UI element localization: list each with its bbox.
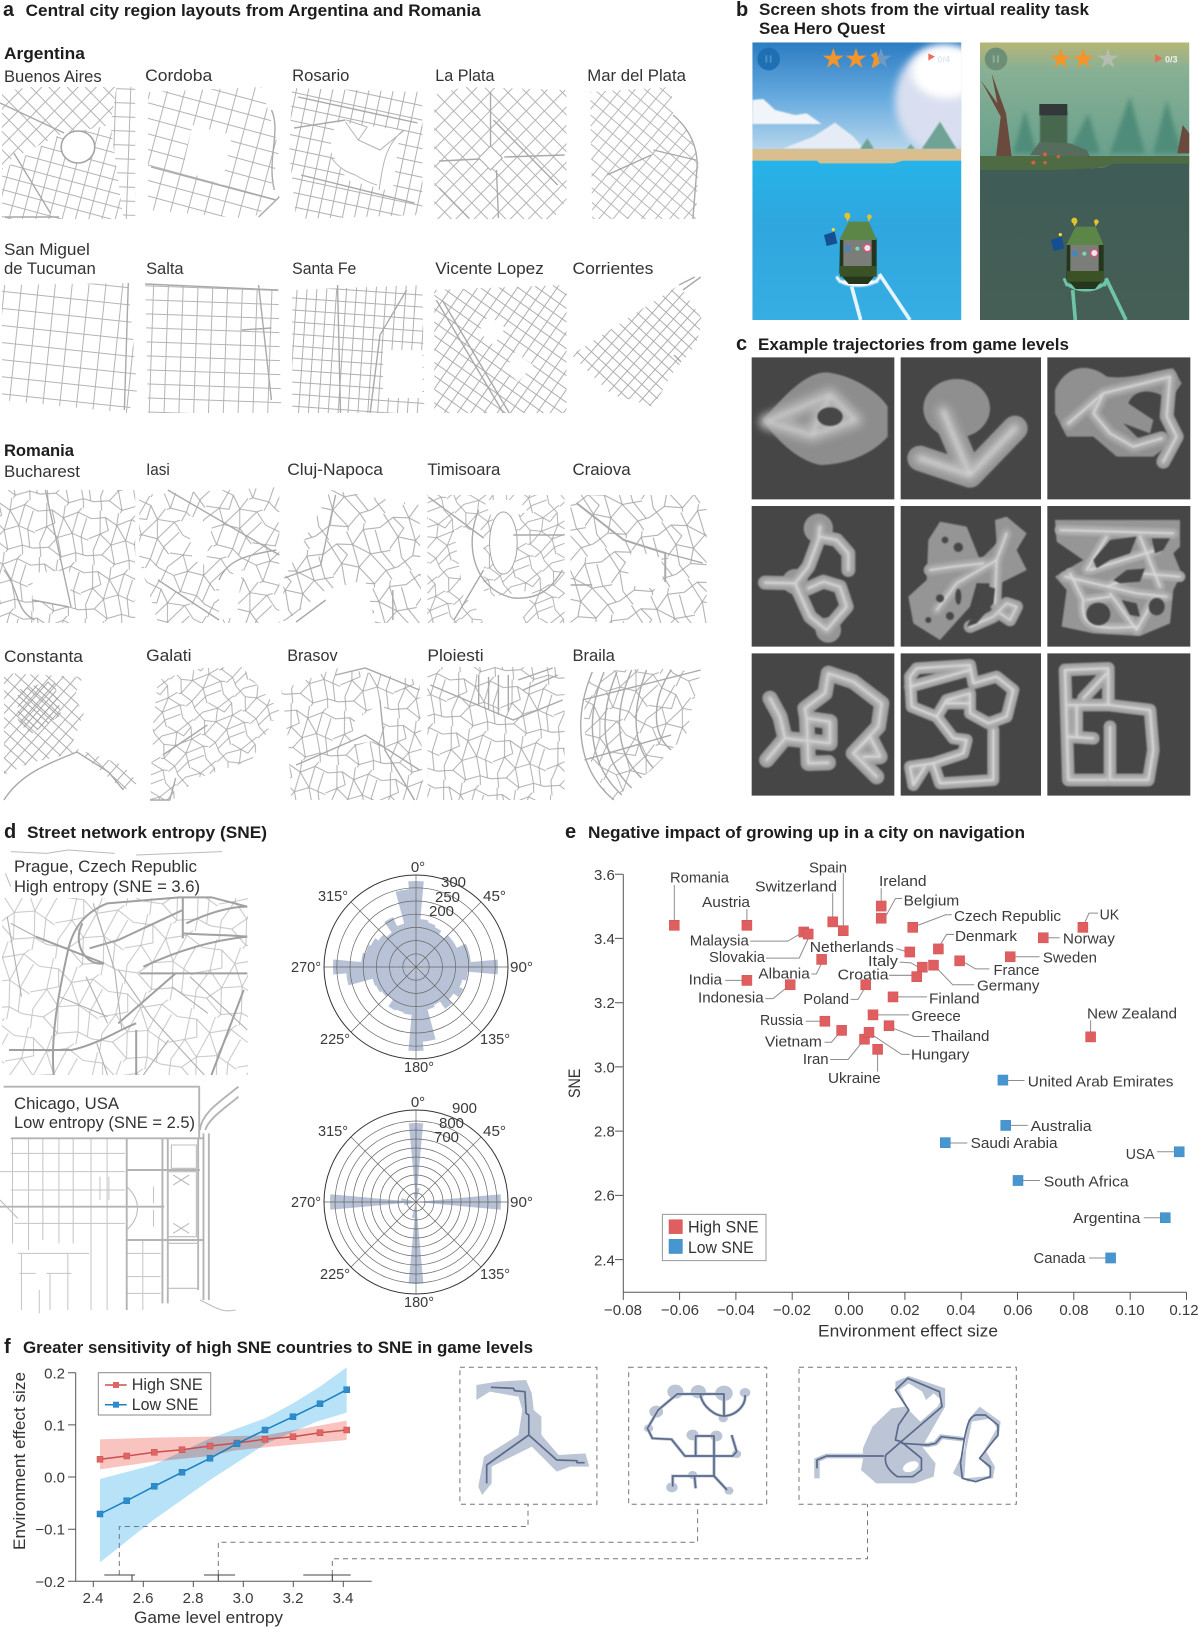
chart axes: 0.10 <box>1115 1302 1145 1319</box>
panel f: game level entropy <box>4 1336 1016 1627</box>
country labels: Vietnam <box>765 1033 822 1050</box>
city: San Miguel de Tucuman: de Tucuman <box>4 260 96 278</box>
city: Mar del Plata <box>587 67 699 219</box>
city: Rosario <box>289 67 422 219</box>
country labels <box>670 859 1177 1267</box>
panel f letter: f <box>4 1336 11 1358</box>
country labels: Greece <box>911 1008 961 1025</box>
trajectory 7 <box>767 673 882 777</box>
trajectory 1 <box>763 372 888 465</box>
map: Prague <box>2 850 248 1075</box>
panel e heading: Negative impact of growing up in a city on navigation <box>588 824 1025 842</box>
chart axes: 2.6 <box>594 1187 615 1204</box>
city: Braila: Braila <box>572 647 616 665</box>
country labels: Thailand <box>931 1028 989 1045</box>
city: Brasov: Brasov <box>287 647 338 665</box>
city: Cordoba <box>145 67 279 219</box>
chart axes: −0.08 <box>604 1302 642 1319</box>
rose chart labels: Prague: 315° <box>318 888 348 905</box>
city: Craiova: Craiova <box>572 461 632 479</box>
rose chart labels: Chicago: 135° <box>480 1266 510 1283</box>
city: Timisoara: Timisoara <box>427 461 501 479</box>
country labels: Poland <box>803 991 849 1008</box>
city: San Miguel de Tucuman: San Miguel <box>4 241 90 259</box>
rose chart labels: Prague: 225° <box>320 1031 350 1048</box>
panel d letter: d <box>4 821 16 843</box>
axis tick labels: 3.4 <box>333 1590 353 1607</box>
city: Cluj-Napoca <box>283 461 421 623</box>
rose chart labels: Chicago: 225° <box>320 1266 350 1283</box>
axis tick labels: 2.8 <box>183 1590 203 1607</box>
country labels: Romania <box>670 869 730 887</box>
confidence bands <box>100 1367 347 1562</box>
city: Ploiesti: Ploiesti <box>427 647 484 665</box>
y axis title: SNE <box>565 1069 584 1098</box>
subheading: Romania: Romania <box>4 442 75 460</box>
chart axes <box>68 1373 372 1587</box>
chart axes: 0.00 <box>834 1302 864 1319</box>
city: Rosario: Rosario <box>292 67 349 85</box>
axis tick labels <box>35 1366 353 1607</box>
city: La Plata: La Plata <box>435 67 495 85</box>
rose chart labels: Chicago: 800 <box>439 1115 464 1132</box>
country labels: Germany <box>977 977 1040 995</box>
trajectory grid <box>752 357 1190 796</box>
city: Santa Fe <box>292 260 424 413</box>
axis tick labels: −0.2 <box>35 1574 65 1591</box>
chart axes: 0.04 <box>946 1302 976 1319</box>
city: Buenos Aires <box>0 68 135 219</box>
example level: medium entropy <box>629 1367 767 1504</box>
panel b: game screenshots <box>736 0 1189 320</box>
country labels: Italy <box>868 953 898 970</box>
panel d heading: Street network entropy (SNE) <box>27 824 267 842</box>
trajectory 8 <box>910 665 1013 785</box>
country labels: UK <box>1100 906 1119 924</box>
rose chart labels: Prague <box>291 859 533 1076</box>
leader lines <box>674 873 1174 1258</box>
city: Constanta: Constanta <box>4 648 84 666</box>
country labels: France <box>994 962 1040 979</box>
panel d: street network entropy <box>0 821 533 1313</box>
rose chart labels: Prague: 135° <box>480 1031 510 1048</box>
screenshot: ocean level <box>752 42 985 320</box>
rose chart labels: Prague: 45° <box>483 888 506 905</box>
country labels: Denmark <box>955 928 1017 945</box>
city: Iasi: Iasi <box>146 461 170 479</box>
panel a: city layouts <box>0 0 707 800</box>
chart axes: 0.12 <box>1169 1302 1199 1319</box>
country labels: Ukraine <box>828 1070 881 1087</box>
city: La Plata <box>434 67 567 219</box>
axis tick labels: 3.2 <box>283 1590 303 1607</box>
caption: Prague: High entropy (SNE = 3.6) <box>14 878 200 896</box>
rose chart labels: Prague: 250 <box>435 889 460 906</box>
city: Corrientes: Corrientes <box>572 260 653 278</box>
axis tick labels: 0.2 <box>44 1366 65 1382</box>
axis tick labels: 0.0 <box>44 1470 65 1486</box>
city: Bucharest <box>0 463 135 623</box>
legend: High SNE <box>688 1218 759 1237</box>
country labels: South Africa <box>1044 1173 1129 1190</box>
panel b heading <box>759 1 1090 38</box>
line chart <box>11 1366 868 1627</box>
trajectory 3 <box>1055 368 1182 462</box>
city: Ploiesti <box>427 647 565 800</box>
city: Buenos Aires: Buenos Aires <box>4 68 102 86</box>
rose chart labels: Prague: 180° <box>404 1059 434 1076</box>
trajectory 2 <box>920 379 1015 475</box>
panel e: scatter plot <box>565 821 1199 1340</box>
country labels: Argentina <box>1073 1210 1141 1227</box>
chart axes: 3.0 <box>594 1060 615 1077</box>
chart axes: 2.4 <box>594 1252 615 1269</box>
country labels: Czech Republic <box>954 908 1061 925</box>
country labels: Saudi Arabia <box>971 1135 1058 1152</box>
panel c letter: c <box>736 333 747 355</box>
chart axes: −0.06 <box>661 1302 699 1319</box>
country labels: New Zealand <box>1087 1005 1177 1022</box>
low SNE markers <box>940 1075 1184 1263</box>
city: Iasi <box>139 461 279 623</box>
rose chart labels: Chicago: 900 <box>452 1100 477 1117</box>
panel f heading: Greater sensitivity of high SNE countries to SNE in game levels <box>23 1339 533 1357</box>
city: Mar del Plata: Mar del Plata <box>587 67 687 85</box>
trajectory 6 <box>1055 520 1182 636</box>
rose chart labels: Chicago: 45° <box>483 1123 506 1140</box>
legend <box>98 1373 211 1415</box>
city: Craiova <box>570 461 707 623</box>
panel b heading: Screen shots from the virtual reality task <box>759 1 1090 19</box>
country labels: Sweden <box>1043 950 1097 967</box>
chart axes: −0.04 <box>717 1302 755 1319</box>
city: Galati: Galati <box>146 647 191 665</box>
panel e letter: e <box>565 821 576 843</box>
series: high SNE <box>97 1427 350 1462</box>
country labels: Spain <box>809 859 847 876</box>
axis tick labels: 2.4 <box>83 1590 103 1607</box>
city: Santa Fe: Santa Fe <box>292 260 356 278</box>
chart axes: −0.02 <box>773 1302 811 1319</box>
panel b heading: Sea Hero Quest <box>759 20 886 38</box>
country labels: USA <box>1126 1146 1156 1163</box>
country labels: Iran <box>803 1051 829 1068</box>
rose chart labels: Chicago: 0° <box>411 1094 425 1111</box>
country labels: Albania <box>758 965 810 982</box>
country labels: Indonesia <box>698 990 764 1007</box>
country labels: Slovakia <box>709 949 766 966</box>
country labels: Norway <box>1063 930 1115 947</box>
city: Vicente Lopez <box>434 260 567 413</box>
country labels: Switzerland <box>755 879 837 896</box>
city: Constanta <box>4 648 138 800</box>
panel c heading: Example trajectories from game levels <box>758 336 1069 354</box>
example level: high entropy <box>799 1367 1016 1504</box>
country labels: Austria <box>702 894 751 911</box>
y axis title: Environment effect size <box>11 1372 29 1550</box>
city: Braila <box>572 647 701 800</box>
country labels: Belgium <box>904 892 959 909</box>
chart axes <box>594 867 1199 1319</box>
city: Brasov <box>281 647 423 800</box>
country labels: United Arab Emirates <box>1028 1073 1174 1090</box>
caption: Chicago: Low entropy (SNE = 2.5) <box>14 1114 195 1132</box>
city: Cordoba: Cordoba <box>145 67 213 85</box>
city: Bucharest: Bucharest <box>4 463 80 481</box>
entropy bins <box>104 1575 351 1581</box>
scatter chart <box>565 859 1199 1340</box>
map: Chicago <box>0 1087 238 1313</box>
panel c: trajectories <box>736 333 1190 796</box>
city: Cluj-Napoca: Cluj-Napoca <box>287 461 384 479</box>
country labels: Hungary <box>911 1046 970 1064</box>
panel a heading: Central city region layouts from Argentina and Romania <box>26 2 482 20</box>
rose chart labels: Prague: 0° <box>411 859 425 876</box>
country labels: Malaysia <box>690 932 749 949</box>
chart axes: 3.4 <box>594 931 615 948</box>
rose chart labels: Chicago: 270° <box>291 1194 321 1211</box>
chart axes: 3.6 <box>594 867 615 884</box>
example level: low entropy <box>460 1367 597 1504</box>
rose chart labels: Chicago <box>291 1094 533 1311</box>
rose chart labels: Chicago: 315° <box>318 1123 348 1140</box>
trajectory 5 <box>908 517 1027 640</box>
screenshot: swamp level: 0/3 <box>1165 54 1177 64</box>
country labels: Ireland <box>879 873 927 890</box>
country labels: Croatia <box>838 966 889 983</box>
rose chart labels: Prague: 270° <box>291 959 321 976</box>
dashed connectors <box>119 1504 868 1575</box>
rose chart labels: Prague: 90° <box>510 959 533 976</box>
legend: Low SNE <box>688 1238 754 1257</box>
city: San Miguel de Tucuman <box>2 241 137 413</box>
caption: Chicago: Chicago, USA <box>14 1095 119 1113</box>
axis tick labels: 3.0 <box>233 1590 253 1607</box>
high SNE markers <box>669 901 1096 1054</box>
chart axes: 0.02 <box>890 1302 920 1319</box>
axis tick labels: −0.1 <box>35 1522 65 1538</box>
screenshot: ocean level: 0/4 <box>937 54 950 64</box>
chart axes: 3.2 <box>594 995 615 1012</box>
rose chart labels: Chicago: 90° <box>510 1194 533 1211</box>
city: Salta <box>145 260 281 413</box>
rose chart labels: Chicago: 180° <box>404 1294 434 1311</box>
caption: Prague <box>14 858 200 896</box>
legend: High SNE <box>132 1376 203 1394</box>
axis tick labels: 0.1 <box>44 1418 65 1434</box>
city: Vicente Lopez: Vicente Lopez <box>435 260 544 278</box>
chart axes: 0.06 <box>1003 1302 1033 1319</box>
country labels: Canada <box>1034 1250 1086 1267</box>
subheading: Argentina: Argentina <box>4 45 86 63</box>
chart axes: 2.8 <box>594 1123 615 1141</box>
city: Salta: Salta <box>146 260 184 278</box>
country labels: Australia <box>1031 1118 1092 1135</box>
legend: Low SNE <box>132 1396 198 1414</box>
chart axes: 0.08 <box>1059 1302 1089 1319</box>
x axis title: Game level entropy <box>134 1609 284 1627</box>
trajectory 4 <box>765 514 848 643</box>
rose chart labels: Prague: 200 <box>429 903 454 920</box>
rose chart: Prague <box>324 875 508 1059</box>
rose chart labels: Chicago: 700 <box>434 1129 459 1146</box>
rose chart: Chicago <box>324 1110 508 1294</box>
screenshot: swamp level <box>980 42 1189 320</box>
series: low SNE <box>97 1387 350 1517</box>
rose chart labels: Prague: 300 <box>441 874 466 891</box>
country labels: India <box>689 971 723 988</box>
caption: Prague: Prague, Czech Republic <box>14 858 197 876</box>
x axis title: Environment effect size <box>818 1321 998 1340</box>
legend <box>662 1214 766 1261</box>
city: Timisoara <box>427 461 565 623</box>
trajectory 9 <box>1065 668 1153 780</box>
city: Galati <box>146 647 279 800</box>
caption: Chicago <box>14 1095 195 1132</box>
city: Corrientes <box>571 260 703 407</box>
country labels: Finland <box>929 991 980 1008</box>
country labels: Netherlands <box>810 939 894 956</box>
axis tick labels: 2.6 <box>133 1590 153 1607</box>
country labels: Russia <box>760 1012 804 1029</box>
